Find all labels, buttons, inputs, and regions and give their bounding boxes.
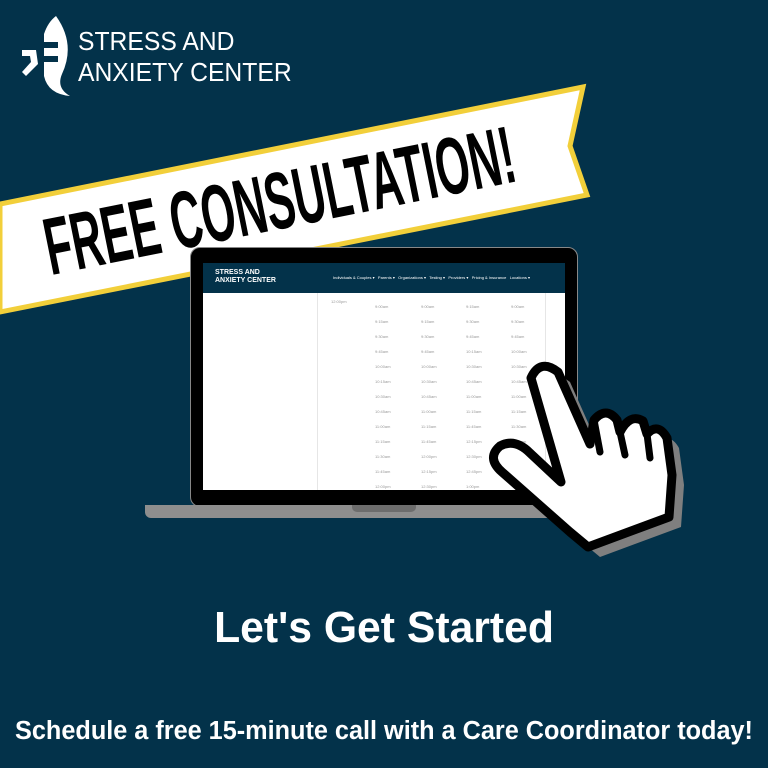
logo text: STRESS AND [78,26,234,56]
laptop base [145,505,597,518]
laptop screen: 10:45am [511,379,527,384]
screen header: Individuals & Couples ▾ Parents ▾ Organizations ▾ Testing ▾ Providers ▾ Pricing & Insurance Locations ▾ [333,275,530,280]
laptop screen: 11:00am [375,424,390,429]
laptop screen: 9:15am [466,304,479,309]
laptop screen: 12:15pm [466,439,482,444]
banner text: FREE CONSULTATION! [36,109,523,292]
screen header [203,263,565,293]
laptop screen: 11:15am [421,424,436,429]
laptop screen: 11:00am [421,409,436,414]
laptop screen: 10:45am [421,394,437,399]
laptop screen: 9:30am [511,319,524,324]
laptop screen: 10:00am [511,349,527,354]
heading: let's get started: Let's Get Started [214,603,554,652]
screen header: ANXIETY CENTER [215,277,276,284]
laptop screen: 12:30pm [421,484,437,489]
screen header: STRESS AND [215,269,260,276]
laptop screen: 11:45am [511,439,526,444]
laptop screen: 9:45am [375,349,388,354]
laptop screen [203,263,565,490]
laptop screen: 11:30am [375,454,390,459]
logo text: ANXIETY CENTER [78,57,292,87]
banner: free consultation [0,84,590,314]
laptop screen: 10:15am [466,349,482,354]
laptop screen: 11:15am [466,409,481,414]
laptop screen: 11:30am [511,424,526,429]
laptop screen: 9:45am [466,334,479,339]
laptop [145,247,578,518]
icon: logo mark [22,16,70,96]
laptop screen: 12:30pm [466,454,482,459]
laptop screen: 10:30am [375,394,391,399]
laptop screen: 10:00am [375,364,391,369]
laptop screen: 9:00am [421,304,434,309]
laptop screen: 9:15am [421,319,434,324]
logo text [78,26,292,87]
laptop screen: 12:00pm [331,299,347,304]
laptop screen: 9:30am [466,319,479,324]
laptop screen: 10:45am [466,379,482,384]
laptop screen: 9:00am [511,304,524,309]
laptop screen: 10:00am [421,364,437,369]
laptop screen: 9:00am [375,304,388,309]
laptop screen: 9:15am [375,319,388,324]
laptop screen: 10:45am [375,409,391,414]
schedule times [317,293,318,490]
laptop screen: 12:15pm [421,469,437,474]
laptop screen: 11:00am [511,394,526,399]
laptop screen: 11:45am [421,439,436,444]
laptop screen: 9:30am [375,334,388,339]
laptop screen: 12:00pm [421,454,437,459]
logo [22,16,292,96]
subtext: Schedule a free 15-minute call with a Care Coordinator today! [15,717,753,745]
laptop screen: 11:15am [511,409,526,414]
laptop screen: 11:45am [375,469,390,474]
laptop screen: 9:45am [421,349,434,354]
laptop screen: 10:30am [466,364,482,369]
laptop screen: 9:30am [421,334,434,339]
laptop screen: 12:00pm [375,484,391,489]
laptop bezel [190,247,578,507]
laptop screen: 12:45pm [466,469,482,474]
laptop screen: 10:15am [375,379,391,384]
laptop screen: 9:45am [511,334,524,339]
laptop screen: 11:45am [466,424,481,429]
laptop screen: 10:30am [511,364,527,369]
laptop screen: 1:00pm [466,484,479,489]
laptop screen: 11:00am [466,394,481,399]
laptop screen: 11:15am [375,439,390,444]
laptop screen: 10:30am [421,379,437,384]
